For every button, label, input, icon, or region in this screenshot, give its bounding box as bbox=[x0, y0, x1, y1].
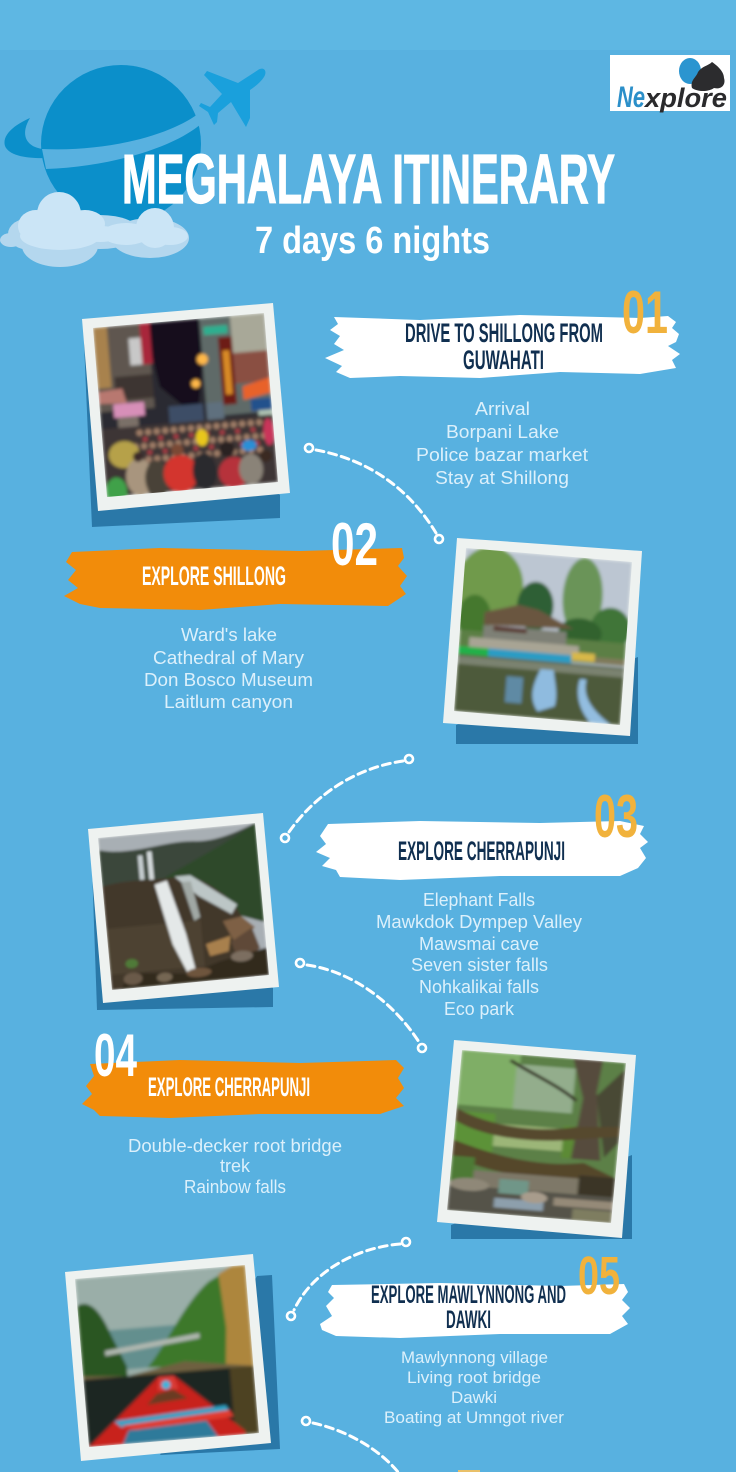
day 1 heading banner bbox=[325, 315, 680, 378]
day 5 heading banner: DAWKI bbox=[446, 1306, 491, 1334]
day 2 heading banner bbox=[64, 548, 407, 610]
day 5 list: Dawki bbox=[451, 1388, 497, 1407]
dashed route 2 bbox=[281, 755, 413, 842]
day 2 heading banner: EXPLORE SHILLONG bbox=[142, 561, 286, 591]
day 2 list: Ward's lake bbox=[181, 625, 277, 645]
day 5 photo card bbox=[65, 1254, 280, 1461]
day 1 heading banner: GUWAHATI bbox=[463, 345, 544, 375]
day 3 list: Mawkdok Dympep Valley bbox=[376, 912, 582, 932]
icon: airplane bbox=[199, 69, 265, 127]
day 2 list: Laitlum canyon bbox=[164, 692, 293, 712]
next number peeking at bottom edge bbox=[458, 1470, 480, 1472]
day 5 list: Boating at Umngot river bbox=[384, 1408, 564, 1427]
day 5 heading banner bbox=[320, 1281, 630, 1338]
icon: globe with ring bbox=[4, 65, 201, 223]
day 4 list bbox=[128, 1136, 342, 1197]
number 03: 03 bbox=[594, 783, 638, 850]
day 4 heading banner: EXPLORE CHERRAPUNJI bbox=[148, 1072, 310, 1102]
day 3 list: Elephant Falls bbox=[423, 890, 535, 910]
day 4 photo card bbox=[437, 1040, 636, 1239]
day 3 photo card bbox=[88, 813, 279, 1010]
day 4 list: Rainbow falls bbox=[184, 1177, 286, 1197]
logo: xplore bbox=[643, 83, 727, 113]
day 2 list: Don Bosco Museum bbox=[144, 670, 313, 690]
icon: cloud bbox=[0, 192, 189, 267]
day 3 heading banner bbox=[316, 821, 648, 880]
number 05: 05 bbox=[578, 1246, 620, 1306]
logo bbox=[610, 55, 730, 114]
dashed route 5 bbox=[302, 1417, 398, 1472]
logo: Ne bbox=[617, 81, 645, 114]
day 2 list bbox=[144, 625, 313, 712]
day 1 list: Borpani Lake bbox=[446, 422, 559, 442]
number 04: 04 bbox=[94, 1022, 137, 1089]
number 02: 02 bbox=[331, 511, 378, 578]
day 3 list bbox=[376, 890, 582, 1019]
day 4 list: Double-decker root bridge bbox=[128, 1136, 342, 1156]
day 4 heading banner bbox=[82, 1060, 404, 1118]
dashed route 4 bbox=[287, 1238, 410, 1320]
day 3 list: Nohkalikai falls bbox=[419, 977, 539, 997]
day 3 heading banner: EXPLORE CHERRAPUNJI bbox=[398, 836, 565, 866]
day 3 list: Eco park bbox=[444, 999, 515, 1019]
day 4 list: trek bbox=[220, 1156, 251, 1176]
day 3 list: Mawsmai cave bbox=[419, 934, 539, 954]
dashed route 1 bbox=[305, 444, 443, 543]
day 1 photo card bbox=[82, 303, 290, 527]
day 5 list: Living root bridge bbox=[407, 1368, 541, 1387]
day 2 list: Cathedral of Mary bbox=[153, 648, 304, 668]
day 1 list bbox=[416, 399, 588, 488]
day 5 heading banner: EXPLORE MAWLYNNONG AND bbox=[371, 1281, 566, 1309]
day 1 list: Arrival bbox=[475, 399, 530, 419]
dashed route 3 bbox=[296, 959, 426, 1052]
day 1 list: Stay at Shillong bbox=[435, 468, 569, 488]
day 2 photo card bbox=[443, 538, 642, 744]
number 01: 01 bbox=[622, 279, 668, 346]
day 1 list: Police bazar market bbox=[416, 445, 588, 465]
day 3 list: Seven sister falls bbox=[411, 955, 548, 975]
day 5 list bbox=[384, 1348, 564, 1427]
day 5 list: Mawlynnong village bbox=[401, 1348, 548, 1367]
subtitle: 7 days 6 nights bbox=[255, 220, 490, 262]
